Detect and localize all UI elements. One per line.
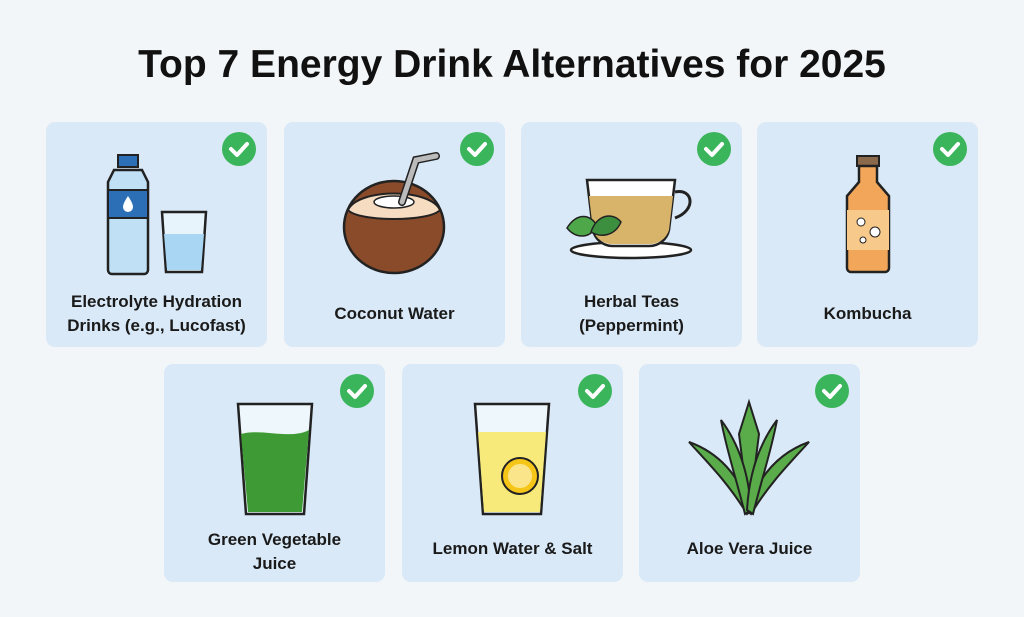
- icon: check: [697, 132, 731, 166]
- icon: coconut: [342, 152, 446, 274]
- panel: electrolyte: [46, 122, 267, 347]
- label: Kombucha: [824, 304, 911, 323]
- panel: coconut: [284, 122, 505, 347]
- label: Herbal Teas: [584, 292, 679, 311]
- title: Top 7 Energy Drink Alternatives for 2025: [138, 43, 886, 86]
- icon: bottle and glass: [106, 154, 208, 276]
- icon: check: [578, 374, 612, 408]
- panel: green juice: [164, 364, 385, 582]
- panel: lemon water: [402, 364, 623, 582]
- icon: check: [340, 374, 374, 408]
- icon: check: [933, 132, 967, 166]
- panel: aloe vera: [639, 364, 860, 582]
- label: [579, 292, 684, 335]
- panel: kombucha: [757, 122, 978, 347]
- panel: herbal tea: [521, 122, 742, 347]
- icon: check: [222, 132, 256, 166]
- icon: aloe plant: [688, 398, 810, 516]
- icon: green glass: [236, 402, 314, 516]
- label: [208, 530, 341, 573]
- label: (Peppermint): [579, 316, 684, 335]
- label: Juice: [253, 554, 296, 573]
- icon: check: [815, 374, 849, 408]
- label: Green Vegetable: [208, 530, 341, 549]
- icon: lemon glass: [474, 402, 550, 516]
- label: [67, 292, 246, 335]
- label: Electrolyte Hydration: [71, 292, 242, 311]
- label: Aloe Vera Juice: [687, 539, 812, 558]
- label: Coconut Water: [334, 304, 455, 323]
- icon: check: [460, 132, 494, 166]
- icon: bottle: [846, 155, 890, 274]
- label: Drinks (e.g., Lucofast): [67, 316, 246, 335]
- icon: tea cup: [566, 178, 692, 260]
- label: Lemon Water & Salt: [433, 539, 592, 558]
